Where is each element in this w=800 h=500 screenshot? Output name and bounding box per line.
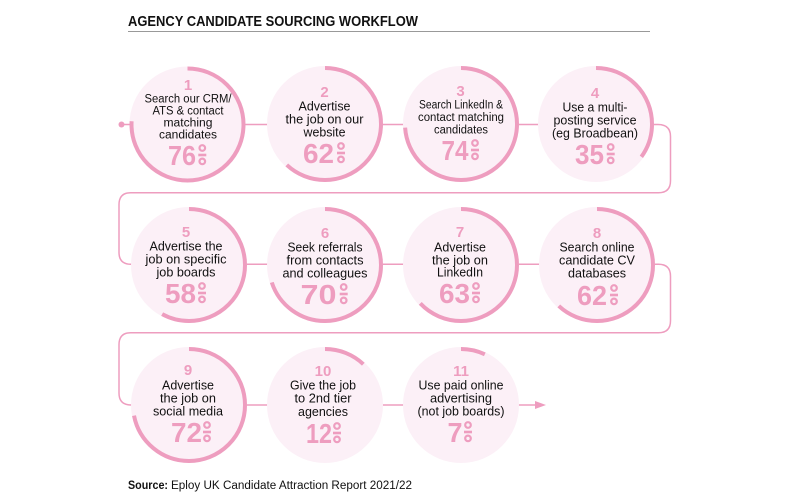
step 1: 76% xyxy=(130,66,246,182)
workflow connector line xyxy=(119,124,670,405)
step 2: 62%: Advertise xyxy=(298,100,351,114)
step 8: 62%: candidate CV xyxy=(559,254,636,268)
step 7: 63% xyxy=(403,207,519,323)
step 7: 63%: 7 xyxy=(456,224,464,241)
step 11: 7%: 11 xyxy=(453,363,469,380)
step 1: 76%: ATS & contact xyxy=(152,106,224,118)
step 10: 12%: to 2nd tier xyxy=(294,392,352,406)
step 3: 74% xyxy=(403,66,519,182)
step 4: 35%: Use a multi- xyxy=(562,100,628,114)
step 5: 58%: job boards xyxy=(155,266,216,280)
step 11: 7%: Use paid online xyxy=(418,378,504,392)
step 5: 58%: 58 xyxy=(165,278,196,309)
step 3: 74%: 74 xyxy=(442,135,469,166)
step 7: 63%: 63 xyxy=(439,278,470,309)
step 1: 76%: 76 xyxy=(168,140,196,171)
step 9: 72%: the job on xyxy=(160,392,216,406)
step 11: 7%: (not job boards) xyxy=(418,404,504,418)
step 6: 70%: and colleagues xyxy=(282,266,368,280)
step 6: 70%: Seek referrals xyxy=(288,240,362,254)
step 2: 62%: the job on our xyxy=(286,112,364,126)
step 2: 62%: 62 xyxy=(303,138,334,169)
step 9: 72%: Advertise xyxy=(162,378,214,392)
step 6: 70% xyxy=(267,207,383,323)
step 7: 63%: the job on xyxy=(432,254,488,268)
step 2: 62% xyxy=(267,66,383,182)
step 3: 74%: Search LinkedIn & xyxy=(419,100,503,112)
step 10: 12%: agencies xyxy=(298,405,348,419)
step 4: 35% xyxy=(538,66,654,182)
step 11: 7%: advertising xyxy=(430,392,492,406)
step 4: 35%: (eg Broadbean) xyxy=(552,126,638,140)
step 1: 76%: matching xyxy=(164,118,212,130)
step 10: 12%: 10 xyxy=(315,363,331,380)
title: AGENCY CANDIDATE SOURCING WORKFLOW xyxy=(128,14,418,30)
step 8: 62%: 62 xyxy=(577,280,607,311)
step 8: 62%: Search online xyxy=(560,240,635,254)
step 8: 62%: 8 xyxy=(593,225,601,242)
step 2: 62%: website xyxy=(303,126,346,140)
step 7: 63%: Advertise xyxy=(434,240,486,254)
step 8: 62%: databases xyxy=(568,266,626,280)
step 10: 12%: Give the job xyxy=(290,378,356,392)
step 6: 70%: 6 xyxy=(321,225,329,242)
step 11: 7%: 7 xyxy=(448,417,462,448)
step 7: 63%: LinkedIn xyxy=(437,266,483,280)
source note: Source: xyxy=(128,480,168,492)
source note: Eploy UK Candidate Attraction Report 2021/22 xyxy=(171,480,412,492)
step 1: 76%: candidates xyxy=(159,130,217,142)
step 5: 58%: job on specific xyxy=(144,252,226,266)
step 9: 72%: 9 xyxy=(184,362,192,379)
step 1: 76%: 1 xyxy=(184,77,192,94)
step 2: 62%: 2 xyxy=(320,84,329,101)
step 9: 72% xyxy=(131,347,247,463)
step 9: 72%: social media xyxy=(153,404,223,418)
step 11: 7% xyxy=(403,347,519,463)
step 10: 12% xyxy=(267,347,383,463)
step 5: 58% xyxy=(131,207,247,323)
step 10: 12%: 12 xyxy=(306,418,332,449)
step 3: 74%: contact matching xyxy=(418,112,504,124)
step 5: 58%: Advertise the xyxy=(150,240,223,254)
step 6: 70%: from contacts xyxy=(286,254,364,268)
step 5: 58%: 5 xyxy=(182,224,190,241)
step 6: 70%: 70 xyxy=(300,279,336,310)
arrow head xyxy=(535,401,546,409)
step 3: 74%: candidates xyxy=(434,124,488,136)
step 1: 76%: Search our CRM/ xyxy=(144,94,232,106)
start dot xyxy=(118,122,124,128)
step 3: 74%: 3 xyxy=(456,83,465,100)
step 4: 35%: posting service xyxy=(554,114,637,128)
step 8: 62% xyxy=(539,207,655,323)
step 4: 35%: 35 xyxy=(575,139,604,170)
step 9: 72%: 72 xyxy=(171,417,202,448)
step 4: 35%: 4 xyxy=(591,85,600,102)
